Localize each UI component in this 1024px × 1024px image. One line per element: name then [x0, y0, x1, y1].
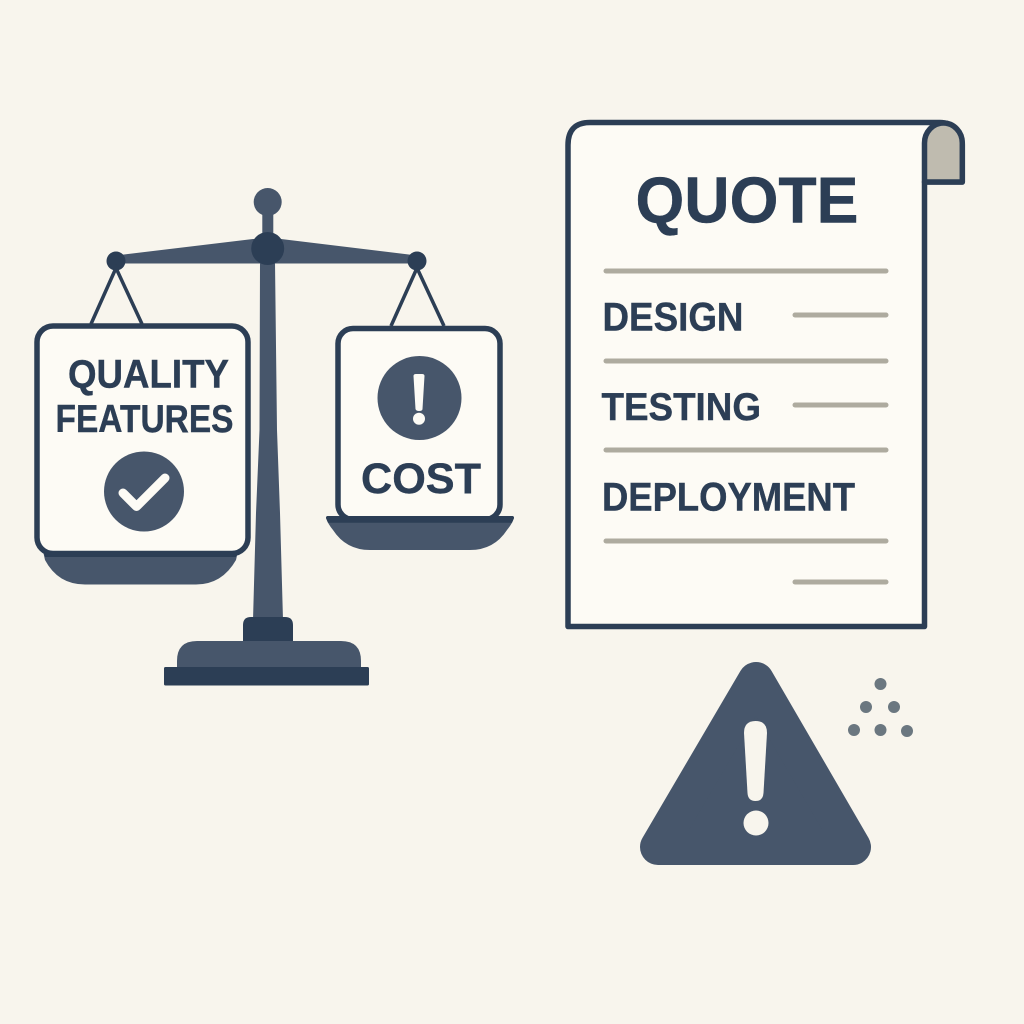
divider lines: [606, 271, 886, 582]
panel: quality features: [37, 326, 248, 554]
right hanger ropes: [391, 268, 444, 326]
document page: [568, 122, 962, 626]
icon: alert circle: [378, 356, 462, 440]
label: features: FEATURES: [56, 398, 234, 441]
left pan: [43, 551, 238, 584]
page curl: [924, 123, 962, 182]
label: quality: QUALITY: [68, 352, 229, 396]
icon: warning triangle: [658, 680, 853, 847]
heading: quote: QUOTE: [636, 164, 858, 236]
balance scale: [37, 188, 514, 686]
row: testing: TESTING: [602, 386, 761, 429]
right pan: [326, 516, 514, 550]
panel: cost: [338, 328, 500, 520]
icon: check mark: [104, 452, 184, 532]
quote document: [568, 122, 962, 626]
left hanger ropes: [91, 268, 142, 324]
row: design: DESIGN: [602, 296, 744, 340]
label: cost: COST: [361, 455, 481, 503]
scale stand: [164, 262, 369, 686]
decorative dots: [848, 678, 913, 737]
scale beam: [106, 188, 426, 270]
row: deployment: DEPLOYMENT: [602, 476, 855, 520]
